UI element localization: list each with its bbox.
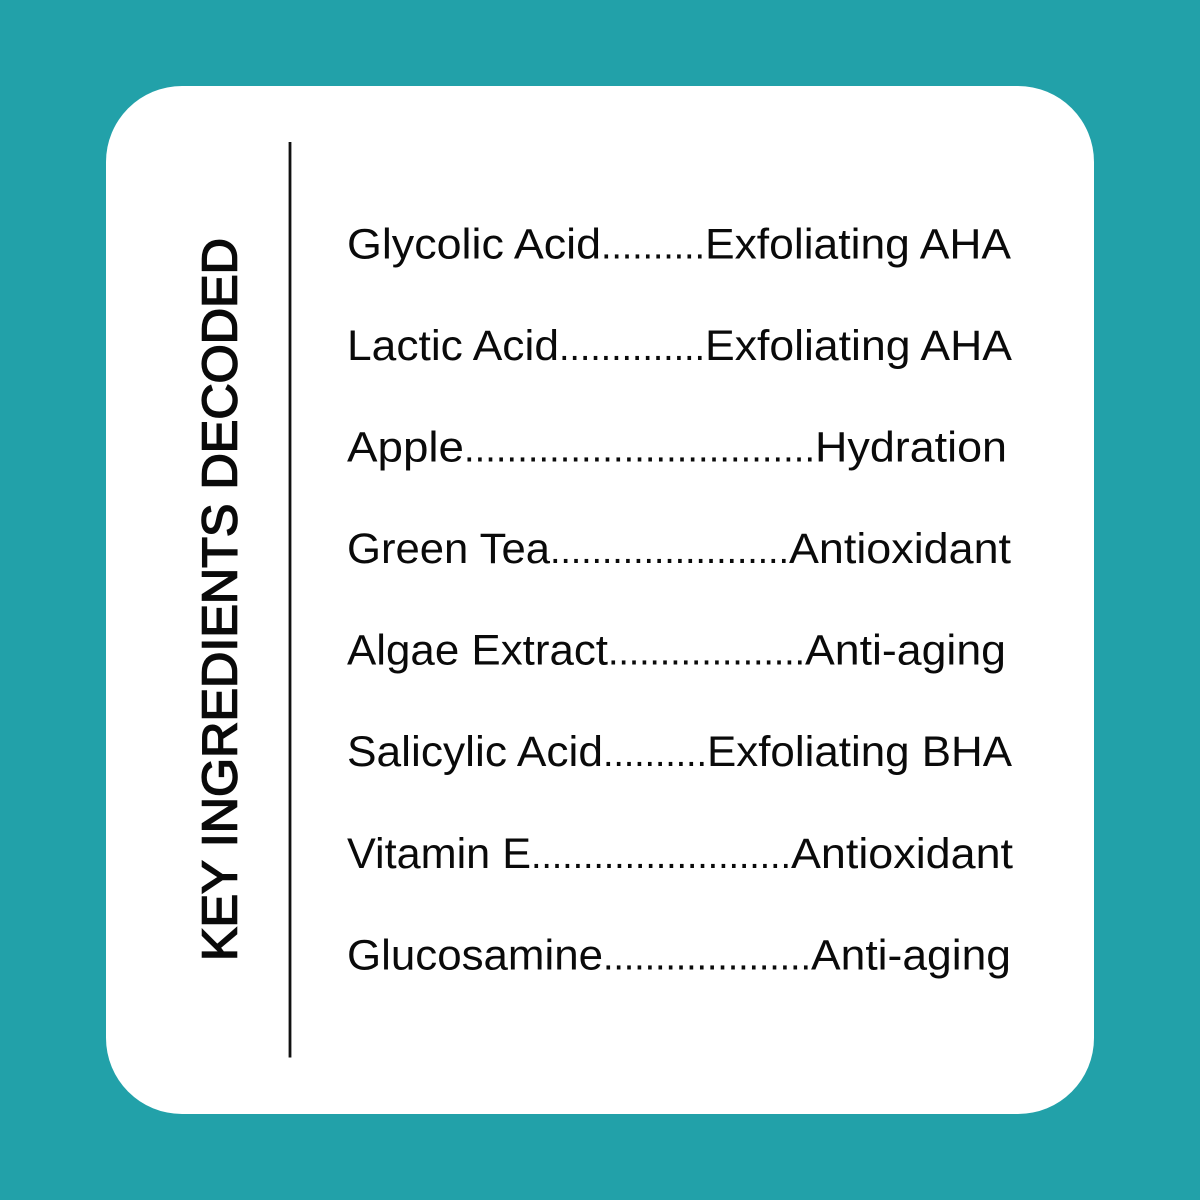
panel: white card	[106, 86, 1094, 1114]
row: glycolic acid: ..........	[601, 226, 705, 268]
row: glucosamine: Glucosamine	[347, 932, 603, 980]
row: glucosamine: ....................	[603, 936, 811, 978]
row: lactic acid	[347, 322, 1012, 370]
row: salicylic acid: Salicylic Acid	[347, 728, 603, 776]
row: apple: Hydration	[815, 424, 1007, 472]
row: glucosamine	[347, 932, 1011, 980]
row: green tea: .......................	[550, 530, 789, 572]
row: lactic acid: ..............	[559, 327, 705, 369]
row: green tea: Antioxidant	[789, 525, 1011, 573]
row: apple	[347, 424, 1007, 472]
row: glycolic acid	[347, 220, 1011, 268]
ingredient list	[347, 220, 1013, 980]
row: salicylic acid: Exfoliating BHA	[707, 728, 1012, 776]
row: salicylic acid	[347, 728, 1012, 776]
row: algae extract: ...................	[608, 632, 805, 674]
row: algae extract: Algae Extract	[347, 626, 608, 674]
row: vitamin e: Vitamin E	[347, 830, 531, 878]
row: green tea: Green Tea	[347, 525, 550, 573]
row: green tea	[347, 525, 1011, 573]
heading: key ingredients decoded: KEY INGREDIENTS DECODED	[194, 238, 248, 961]
row: vitamin e	[347, 830, 1013, 878]
row: glycolic acid: Glycolic Acid	[347, 220, 601, 268]
row: glycolic acid: Exfoliating AHA	[705, 220, 1011, 268]
row: lactic acid: Exfoliating AHA	[705, 322, 1012, 370]
vertical divider line	[289, 142, 291, 1058]
row: vitamin e: Antioxidant	[791, 830, 1013, 878]
row: salicylic acid: ..........	[603, 733, 707, 775]
row: algae extract	[347, 626, 1006, 674]
row: apple: Apple	[347, 424, 464, 472]
row: vitamin e: .........................	[531, 835, 791, 877]
row: algae extract: Anti-aging	[805, 626, 1006, 674]
row: glucosamine: Anti-aging	[811, 932, 1011, 980]
row: apple: .................................	[464, 428, 815, 470]
row: lactic acid: Lactic Acid	[347, 322, 559, 370]
